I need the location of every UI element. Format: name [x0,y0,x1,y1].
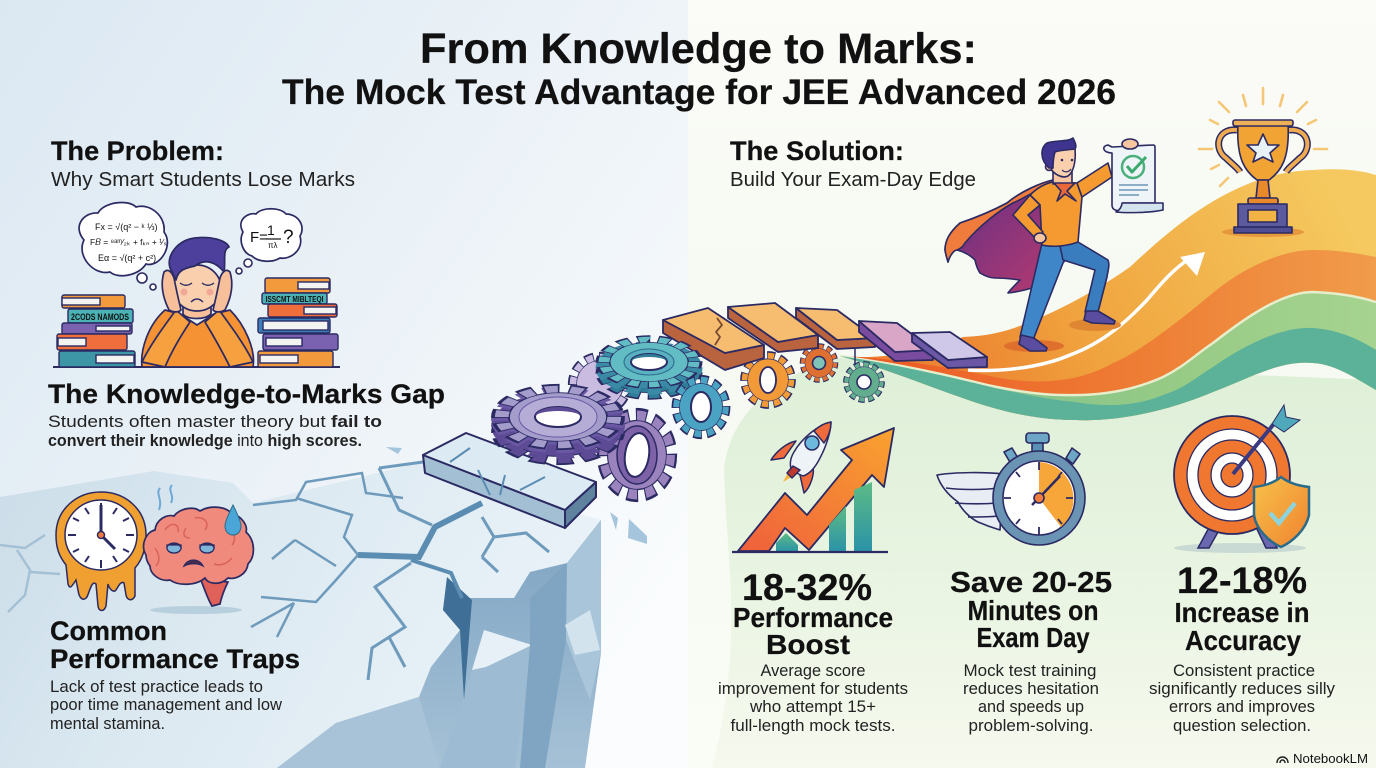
heading: the solution: The Solution: [730,136,904,166]
stat: save minutes: and speeds up [978,697,1084,716]
background: problem side [0,0,688,768]
title: The Mock Test Advantage for JEE Advanced 2026 [282,73,1116,112]
stat: performance boost: improvement for students [718,679,908,698]
text: common performance traps [50,616,300,733]
rocket [771,422,831,493]
cracked ice brick [423,433,596,528]
stat: save minutes [950,567,1112,735]
stat: save minutes: Minutes on [968,595,1098,626]
white progress arrow [968,252,1205,370]
title: From Knowledge to Marks: [420,25,977,73]
stat: performance boost: who attempt 15+ [749,697,876,716]
stat: increase in accuracy: significantly reduces silly [1149,679,1335,698]
icon: melting clock [56,492,146,610]
stat: increase in accuracy: errors and improves [1169,697,1315,716]
stat: increase in accuracy [1149,560,1335,735]
cracked ice cliff [0,462,601,768]
ice shards [386,447,647,544]
stat: save minutes: Exam Day [976,622,1090,653]
stat: performance boost: Average score [760,661,866,680]
heading: the problem: Why Smart Students Lose Marks [51,169,355,191]
thought bubble: F = 1/?: F= [250,229,268,246]
text: common performance traps: poor time management and low [50,695,283,714]
icon: exhausted brain [144,485,253,614]
stat: increase in accuracy: Accuracy [1185,625,1301,656]
stat: performance boost: Boost [766,629,850,660]
stat: performance boost: 18-32% [742,567,872,608]
text: the knowledge-to-marks gap: Students often master theory but fail to [48,412,382,431]
icon: superhero student with scroll [945,138,1163,352]
icon: target with arrow and shield [1174,405,1309,553]
background: pale green field [712,358,1376,768]
heading: the solution [730,136,976,191]
text: common performance traps: Lack of test practice leads to [50,677,263,696]
student figure [142,237,253,367]
title [282,25,1116,112]
icon: trophy with rays [1199,88,1327,237]
text: common performance traps: Common [50,616,167,646]
illustration: stressed student with books [53,202,340,367]
thought bubble: formulas: Fx = √(q² − ᵏ ⅓) [95,222,158,232]
thought bubble: F = 1/?: ? [283,227,294,248]
stat: increase in accuracy: 12-18% [1177,560,1307,601]
flowing ribbon path [840,169,1376,420]
stat: save minutes: Mock test training [964,661,1096,680]
stat: increase in accuracy: Consistent practice [1173,661,1315,680]
text: the knowledge-to-marks gap: The Knowledge-to-Marks Gap [48,379,445,409]
text: the knowledge-to-marks gap: convert their knowledge into high scores. [48,431,362,450]
text: common performance traps: Performance Traps [50,644,300,674]
book stack: right [258,278,338,367]
thought bubble: F = 1/? [236,209,302,274]
illustration: stressed student with books: 2CODS NAMODS [71,312,129,322]
heading: the solution: Build Your Exam-Day Edge [730,169,976,191]
stepping-stone bricks [663,303,987,370]
stat: save minutes: reduces hesitation [963,679,1099,698]
icon: winged stopwatch [937,433,1085,545]
stat: save minutes: Save 20-25 [950,567,1112,599]
text: common performance traps: mental stamina. [50,714,165,733]
thought bubble: F = 1/?: πλ [268,241,278,250]
stat: save minutes: problem-solving. [968,716,1094,735]
thought bubble: formulas [79,202,167,290]
logo: NotebookLM: NotebookLM [1293,751,1368,766]
growth bars [776,482,872,552]
icon: rocket and rising arrow [732,422,894,552]
stat: performance boost [718,567,908,735]
gears: pale, purple, teal, blue [502,340,726,495]
small orange and green gears [745,345,882,404]
heading: the problem: The Problem: [51,136,224,166]
stat: increase in accuracy: Increase in [1174,597,1310,628]
book stack: left [57,295,135,367]
text: the knowledge-to-marks gap [48,379,445,450]
illustration: stressed student with books: ISSCMT MIBLTEQI [266,295,324,304]
thought bubble: formulas: F𝐵 = ⁸ᵃᵐ⁄₂ₖ + fₖₙ + ¹⁄ₛ [90,237,167,247]
thought bubble: formulas: Eα = √(q² + c²) [98,253,156,263]
rising arrow [738,428,894,551]
stat: performance boost: full-length mock tests. [730,716,896,735]
stat: increase in accuracy: question selection. [1173,716,1311,735]
heading: the problem [51,136,355,191]
stat: performance boost: Performance [733,602,893,633]
thought bubble: F = 1/?: 1 [267,222,275,238]
background: solution side [688,0,1376,768]
